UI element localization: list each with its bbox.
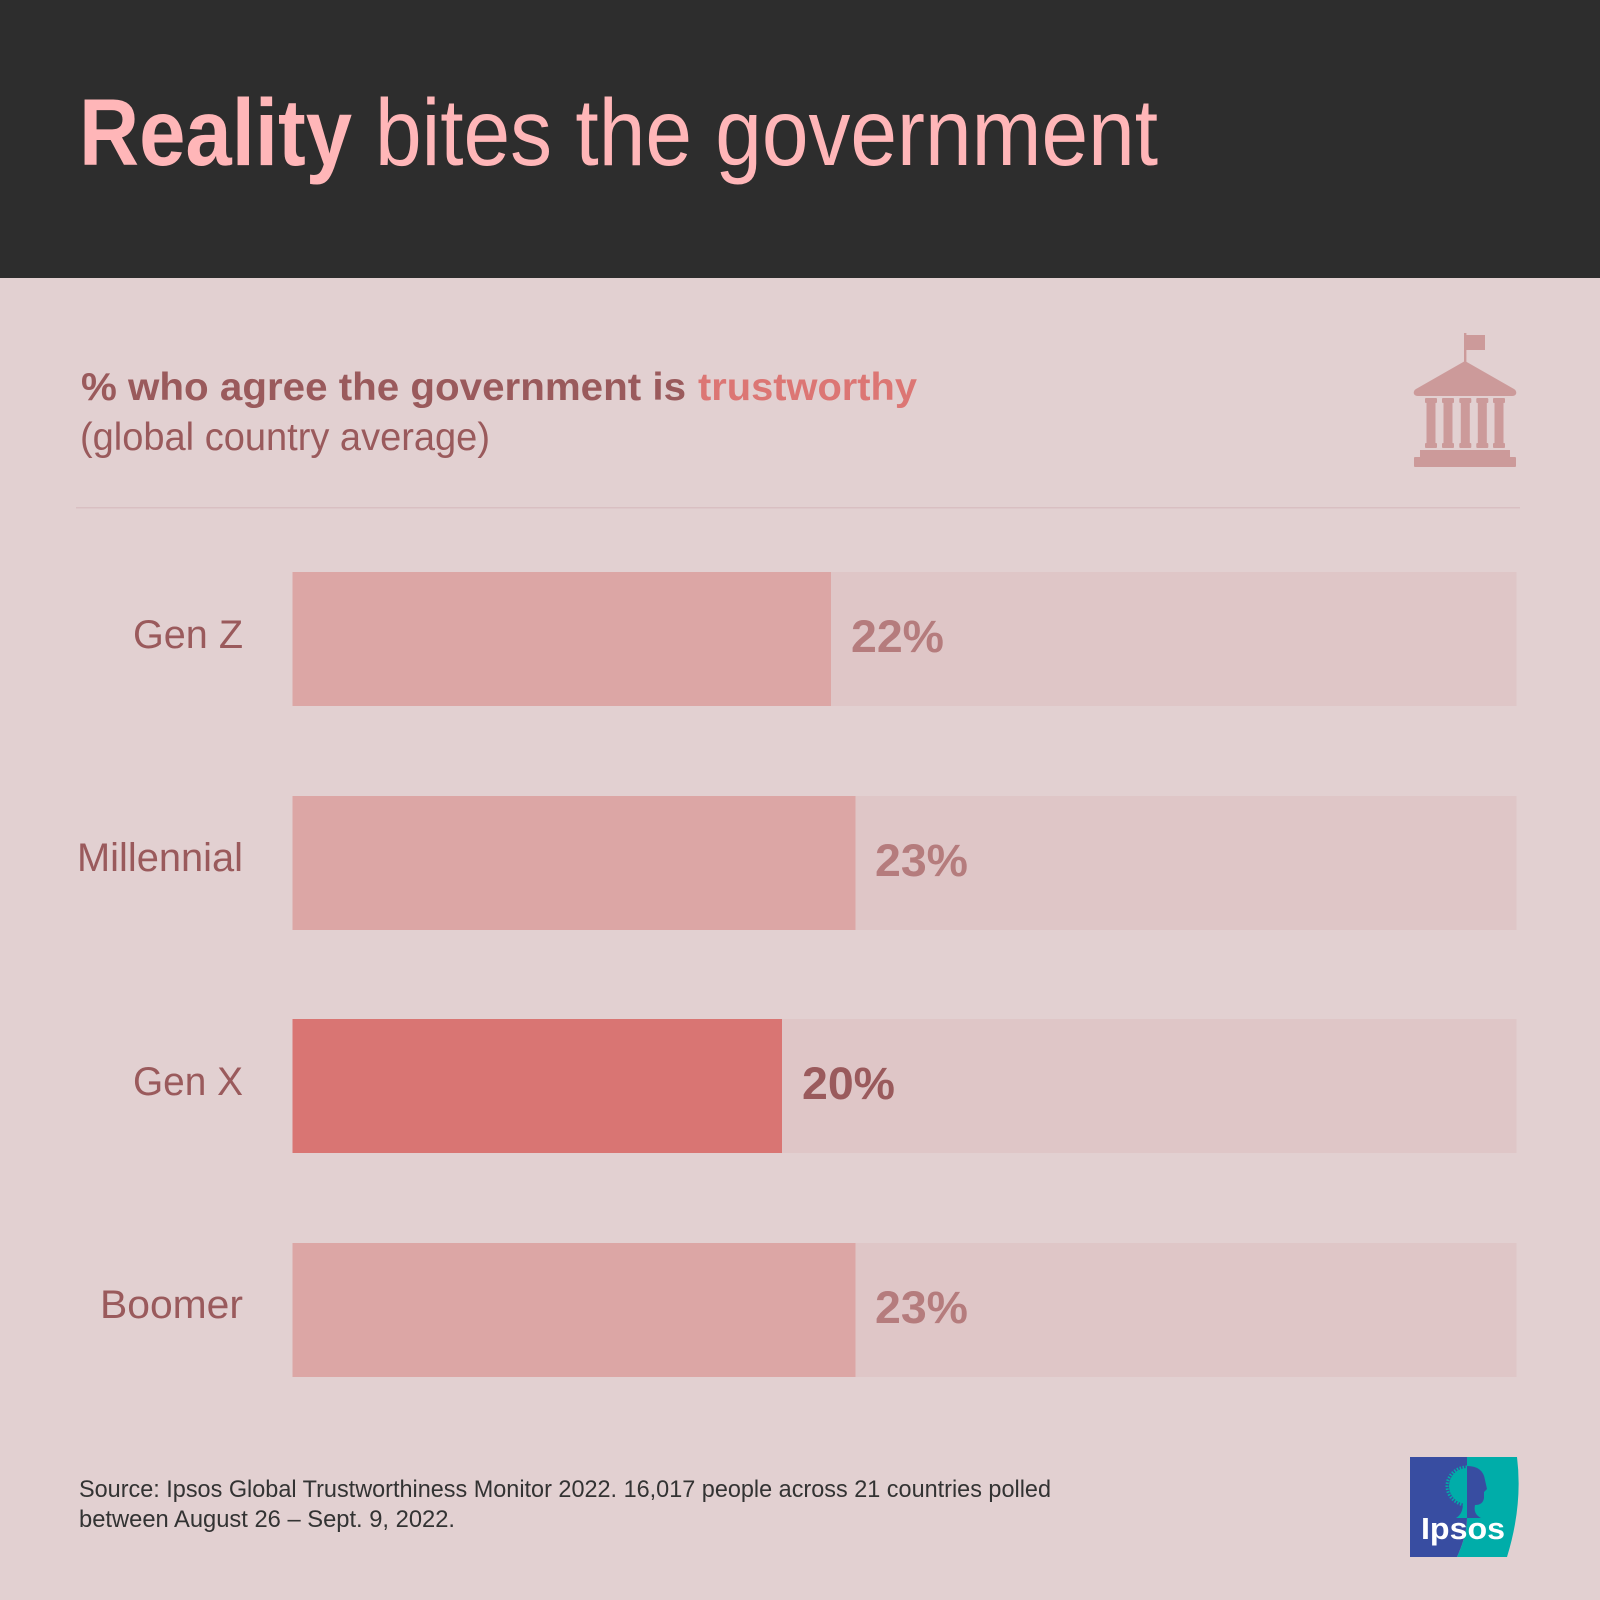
row: Gen X (133, 1019, 1516, 1153)
header band (0, 0, 1600, 278)
bar: Millennial 23% (292, 796, 856, 930)
subtitle: (global country average) (80, 416, 490, 459)
label: Millennial: Millennial (77, 836, 243, 880)
source note: between August 26 – Sept. 9, 2022. (79, 1506, 455, 1533)
subtitle: trustworthy (698, 366, 917, 409)
title: Reality (79, 80, 352, 186)
bar: Boomer 23% (292, 1243, 856, 1377)
value: Boomer: 23% (875, 1282, 968, 1333)
source note (79, 1476, 1051, 1533)
value: Gen X: 20% (802, 1058, 895, 1109)
subtitle (80, 366, 917, 459)
bar: Gen Z 22% (292, 572, 831, 706)
row: Millennial (77, 796, 1516, 930)
title: bites the government (375, 80, 1158, 186)
label: Gen Z: Gen Z (133, 613, 243, 657)
label: Gen X: Gen X (133, 1060, 243, 1104)
bar track: Gen Z (292, 572, 1516, 706)
value: Gen Z: 22% (851, 611, 944, 662)
bar track: Gen X (292, 1019, 1516, 1153)
Ipsos logo (1410, 1457, 1519, 1557)
source note: Source: Ipsos Global Trustworthiness Monitor 2022. 16,017 people across 21 countries polled (79, 1476, 1051, 1503)
bar track: Millennial (292, 796, 1516, 930)
subtitle: % who agree the government is (81, 366, 686, 409)
title (79, 80, 1158, 186)
Ipsos logo: Ipsos (1421, 1511, 1505, 1546)
icon: government building (1414, 333, 1516, 467)
row: Gen Z (133, 572, 1516, 706)
value: Millennial: 23% (875, 835, 968, 886)
label: Boomer: Boomer (100, 1283, 243, 1327)
bar: Gen X 20% (292, 1019, 782, 1153)
row: Boomer (100, 1243, 1516, 1377)
bar track: Boomer (292, 1243, 1516, 1377)
